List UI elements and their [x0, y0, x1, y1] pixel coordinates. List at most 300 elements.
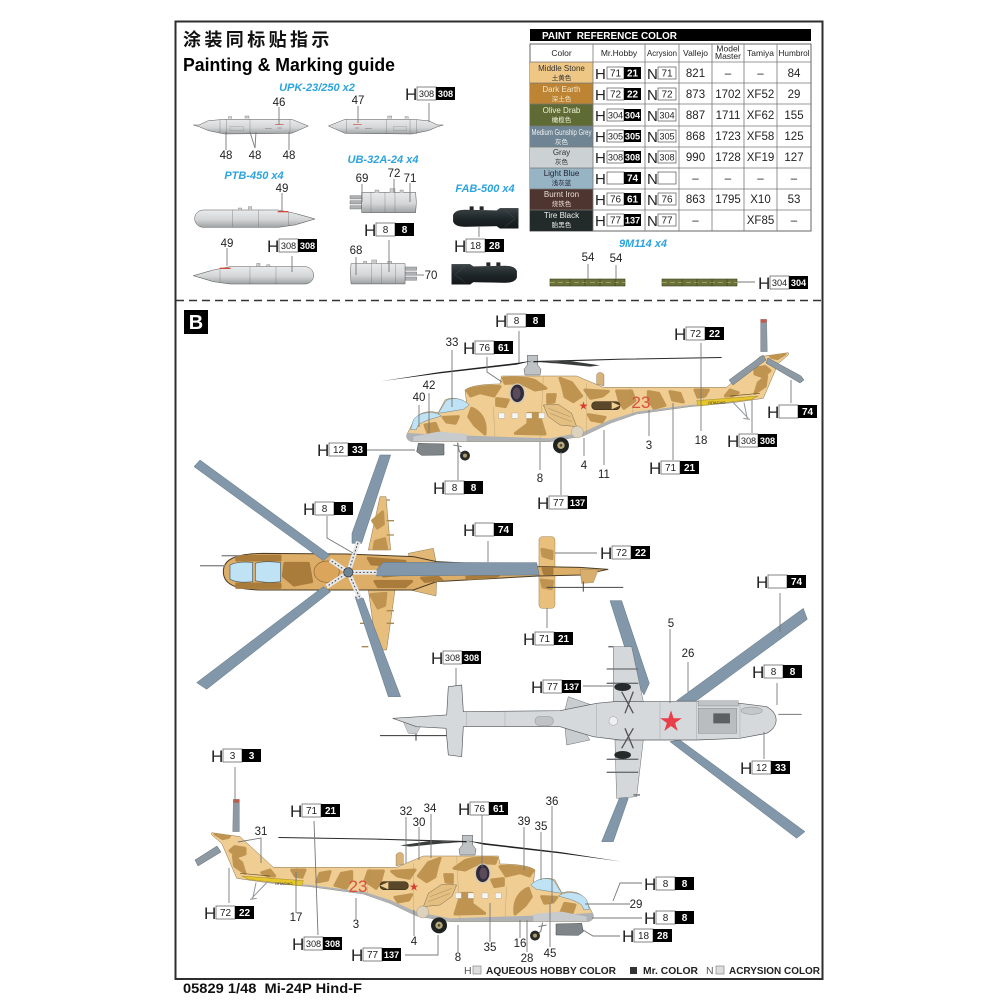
- brand equivalents: –: [725, 68, 732, 80]
- brand equivalents: 873: [686, 89, 705, 101]
- table heading: [530, 29, 811, 42]
- brand equivalents: 127: [784, 152, 804, 164]
- 9M114 missile left: [550, 279, 625, 286]
- PTB-450 tank lower: [193, 263, 314, 284]
- Mr.Hobby and Acrysion codes: 137: [625, 216, 640, 226]
- stabilizer and fuselage: [393, 685, 776, 757]
- H label 8 nose gear: [433, 479, 483, 498]
- H label 3 3: [211, 747, 261, 766]
- FAB-500 bomb upper: [453, 207, 518, 228]
- tail stabilizer: [539, 537, 555, 608]
- H label 12 33 nose: H: [740, 759, 752, 778]
- tail text: ОПАСНО: [275, 881, 292, 886]
- red number 23: 23: [632, 393, 650, 412]
- helicopter: port side view: [378, 319, 804, 461]
- H label 77 137: H: [537, 494, 549, 513]
- H label 308 tank: 308: [300, 241, 315, 251]
- starboard part numbers: 30: [413, 817, 425, 829]
- H label 18 28 gun: H: [622, 927, 634, 946]
- brand equivalents: 1795: [715, 194, 741, 206]
- H label 76 61 starboard: 61: [493, 804, 504, 815]
- color names: Medium Gunship Grey: [532, 128, 592, 137]
- Mr.Hobby and Acrysion codes: N: [647, 129, 658, 146]
- H label 74 top blade: H: [463, 521, 475, 540]
- ordnance part numbers: 72: [388, 168, 400, 180]
- Mr.Hobby and Acrysion codes: 22: [627, 90, 638, 100]
- ordnance headings: FAB-500 x4: [455, 183, 515, 195]
- helicopter: top view: [194, 455, 623, 697]
- H label 76 61 starboard: 76: [474, 804, 485, 815]
- brand equivalents: 821: [686, 68, 705, 80]
- ordnance part numbers: 47: [352, 95, 364, 107]
- H label 308 starboard: 308: [306, 939, 321, 949]
- H label 76 61: [463, 339, 513, 358]
- H label 8 nose: 8: [771, 667, 777, 678]
- ordnance headings: UB-32A-24 x4: [348, 154, 418, 166]
- color names: Dark Earth: [542, 85, 581, 94]
- H label 304: [758, 274, 808, 293]
- H label 8 canopy: 8: [682, 879, 688, 890]
- H label 71 21 starboard: [290, 802, 340, 821]
- H label 71 21 starboard: H: [290, 802, 302, 821]
- side view part numbers: 33: [446, 337, 458, 349]
- brand equivalents: 863: [686, 194, 705, 206]
- product footer: 05829 1/48 Mi-24P Hind-F: [183, 981, 362, 996]
- struts: [622, 692, 633, 748]
- section B badge: B: [189, 312, 203, 334]
- brand equivalents: X10: [750, 194, 771, 206]
- Mr.Hobby and Acrysion codes: 72: [610, 90, 621, 100]
- starboard part numbers: 35: [535, 821, 547, 833]
- ordnance part numbers: 48: [249, 150, 261, 162]
- starboard part numbers: 16: [514, 938, 526, 950]
- H label 308: [405, 85, 455, 104]
- color names: Middle Stone: [538, 64, 585, 73]
- brand equivalents: 990: [686, 152, 705, 164]
- tail fin: [402, 718, 422, 734]
- H label 18 28 gun: [622, 927, 672, 946]
- brand equivalents: –: [725, 173, 732, 185]
- UB-32 rocket pod lower: [350, 260, 417, 284]
- brand equivalents: –: [791, 215, 798, 227]
- H label 72 22 starboard: 72: [220, 908, 231, 919]
- starboard part numbers: 3: [353, 919, 359, 931]
- Mr.Hobby and Acrysion codes: 71: [610, 68, 621, 80]
- starboard part numbers: 17: [290, 912, 302, 924]
- tail blade: [380, 732, 447, 741]
- H label 77 137: 77: [553, 498, 564, 509]
- H label 12 33: H: [317, 441, 329, 460]
- brand equivalents: –: [757, 68, 764, 80]
- H label 8 nose gear: 8: [471, 483, 477, 494]
- H label 72 22: 22: [709, 329, 720, 340]
- helicopter: starboard side view: [195, 799, 622, 941]
- H label 12 33: 33: [352, 445, 363, 456]
- FAB-500 bomb lower: [452, 263, 517, 284]
- underside part numbers: 5: [668, 618, 674, 630]
- red number 23: 23: [349, 877, 367, 896]
- H label 308 tank: [267, 237, 317, 256]
- H label 308 skid: 308: [741, 436, 756, 446]
- H label 71 21 stabilizer: H: [523, 630, 535, 649]
- H label 72 22 stabilizer: 22: [635, 548, 646, 559]
- ordnance part numbers: 48: [220, 150, 232, 162]
- H label 308 belly: H: [431, 649, 443, 668]
- H label 18 28: H: [454, 237, 466, 256]
- H label 77 137 starboard: [351, 946, 401, 965]
- H label 77 137 starboard: 77: [367, 950, 378, 961]
- starboard part numbers: 8: [455, 952, 461, 964]
- Mr.Hobby and Acrysion codes: 308: [625, 152, 640, 162]
- side view part numbers: 42: [423, 380, 435, 392]
- H label 77 137 starboard: H: [351, 946, 363, 965]
- brand equivalents: –: [692, 173, 699, 185]
- H label 74: H: [767, 403, 779, 422]
- H label 12 33 nose: 33: [775, 763, 786, 774]
- red star underside: ★: [660, 708, 682, 734]
- H label 8 nose: H: [752, 663, 764, 682]
- ordnance drawings: [193, 116, 737, 286]
- color names: 灰色: [555, 137, 568, 146]
- H label 304: 304: [791, 278, 807, 288]
- H label 72 22: [674, 325, 724, 344]
- Mr.Hobby and Acrysion codes: H: [595, 171, 606, 188]
- UB-32 rocket pod upper: [350, 189, 416, 213]
- brand equivalents: 1723: [715, 131, 741, 143]
- starboard part numbers: 32: [400, 806, 412, 818]
- H label 72 22 stabilizer: 72: [616, 548, 627, 559]
- H label 8 nose lower: H: [644, 909, 656, 928]
- Mr.Hobby and Acrysion codes: N: [647, 66, 658, 83]
- rotor blades: [194, 460, 330, 561]
- H label 308 starboard: H: [292, 935, 304, 954]
- Mr.Hobby and Acrysion codes: 76: [661, 194, 673, 206]
- H label 308 starboard: 308: [325, 939, 340, 949]
- H label 308 belly: 308: [464, 653, 479, 663]
- 9M114 missile right: [662, 279, 737, 286]
- H label 76 61: 76: [479, 343, 490, 354]
- Mr.Hobby and Acrysion codes: 305: [659, 132, 675, 142]
- H label 8 hub: [495, 312, 545, 331]
- starboard part numbers: 39: [518, 816, 530, 828]
- H label 74 blade: 74: [791, 577, 802, 588]
- canopies: [230, 562, 253, 582]
- side view part numbers: 3: [646, 440, 652, 452]
- ordnance part numbers: 48: [283, 150, 295, 162]
- english title: Painting & Marking guide: [183, 55, 395, 75]
- engine intakes: [565, 697, 592, 745]
- H label 72 22 starboard: [204, 904, 254, 923]
- H label 12 33: [317, 441, 367, 460]
- ordnance part numbers: [220, 95, 623, 282]
- Mr.Hobby and Acrysion codes: 72: [661, 90, 673, 100]
- H label 77 137: [537, 494, 587, 513]
- table column headings: Model: [716, 44, 740, 54]
- Mr.Hobby and Acrysion codes: 304: [659, 110, 675, 120]
- rotor hub: [327, 542, 377, 598]
- table column headings: Master: [715, 51, 741, 61]
- brand equivalents: 887: [686, 110, 705, 122]
- Mr.Hobby and Acrysion codes: 71: [661, 68, 673, 80]
- color names: Gray: [553, 148, 570, 157]
- H label 8 top rotor: 8: [341, 504, 347, 515]
- ordnance part numbers: 54: [582, 252, 595, 264]
- Mr.Hobby and Acrysion codes: [595, 66, 676, 230]
- color names: 浅灰蓝: [552, 178, 572, 187]
- table column headings: Color: [551, 48, 572, 58]
- H label 74 top blade: 74: [498, 525, 509, 536]
- H label 8 nose lower: [644, 909, 694, 928]
- starboard part numbers: 45: [544, 948, 556, 960]
- H label 8 top rotor: [303, 500, 353, 519]
- brand equivalents: XF62: [747, 110, 774, 122]
- H label 308 belly: 308: [445, 653, 460, 663]
- H label 12 33: 12: [333, 445, 344, 456]
- PTB-450 tank upper: [195, 207, 315, 227]
- engine bay: [698, 708, 737, 733]
- H label 3 3: 3: [249, 751, 255, 762]
- tail text: ОПАСНО: [708, 400, 725, 405]
- Mr.Hobby and Acrysion codes: 304: [625, 110, 641, 120]
- color names: 橄榄色: [552, 115, 572, 124]
- brand equivalents: 868: [686, 131, 705, 143]
- H label 71 21: 21: [684, 463, 695, 474]
- starboard part numbers: 28: [521, 953, 533, 965]
- ordnance part numbers: 70: [425, 270, 437, 282]
- page frame: [176, 22, 822, 979]
- underside part numbers: [668, 618, 694, 660]
- helicopter: underside view: [380, 601, 807, 842]
- H label 74 blade: [756, 573, 806, 592]
- H label 8 pod: 8: [402, 225, 408, 236]
- H label 71 21 stabilizer: [523, 630, 573, 649]
- H label 76 61 starboard: [458, 800, 508, 819]
- Mr.Hobby and Acrysion codes: 308: [608, 152, 623, 162]
- H label 18 28: [454, 237, 504, 256]
- H label 308 tank: 308: [281, 241, 296, 251]
- nose probe: [778, 713, 802, 716]
- H label 71 21 stabilizer: 71: [539, 634, 550, 645]
- UPK-23 pod right: [328, 116, 443, 134]
- paint legend: [464, 965, 820, 977]
- H label 8 pod: [364, 221, 414, 240]
- starboard part numbers: [255, 796, 642, 965]
- side view part numbers: 40: [413, 392, 425, 404]
- paint reference table: [530, 29, 811, 231]
- H label 77 137 belly: 137: [564, 682, 579, 692]
- brand equivalents: XF85: [747, 215, 774, 227]
- Mr.Hobby and Acrysion codes: 305: [608, 132, 623, 142]
- side view part numbers: 18: [695, 435, 707, 447]
- brand equivalents: 1702: [715, 89, 741, 101]
- H label 71 21: H: [649, 459, 661, 478]
- table column headings: Acrysion: [647, 48, 677, 58]
- ordnance headings: 9M114 x4: [619, 238, 667, 250]
- H label 8 nose gear: 8: [452, 483, 458, 494]
- brand equivalents: –: [692, 215, 699, 227]
- paint legend: Mr. COLOR: [643, 965, 698, 977]
- wings: [368, 497, 395, 650]
- brand equivalents: 84: [788, 68, 801, 80]
- brand equivalents: 1711: [716, 110, 740, 122]
- H label 308 tank: H: [267, 237, 279, 256]
- H label 71 21: [649, 459, 699, 478]
- H label 71 21 starboard: 71: [306, 806, 317, 817]
- H label 72 22 stabilizer: [600, 544, 650, 563]
- brand equivalents: –: [757, 173, 764, 185]
- H label 77 137 belly: [531, 678, 581, 697]
- underside leader lines: [670, 593, 780, 759]
- H label 18 28 gun: 18: [638, 931, 649, 942]
- ordnance part numbers: 49: [276, 183, 288, 195]
- paint legend: ACRYSION COLOR: [729, 965, 820, 977]
- tail rotor: [547, 582, 623, 592]
- starboard part numbers: 36: [546, 796, 558, 808]
- brand equivalents: 1728: [715, 152, 741, 164]
- Mr.Hobby and Acrysion codes: H: [595, 87, 606, 104]
- side view part numbers: 4: [581, 460, 588, 472]
- H label 76 61: H: [463, 339, 475, 358]
- H label 308 skid: 308: [760, 436, 775, 446]
- color names: 烧铁色: [552, 199, 572, 208]
- H label 8 hub: 8: [514, 316, 520, 327]
- H label 308 starboard: [292, 935, 342, 954]
- H label 8 pod: 8: [383, 225, 389, 236]
- H label 74 blade: H: [756, 573, 768, 592]
- table column headings: Humbrol: [778, 48, 810, 58]
- H label 308: 308: [438, 89, 453, 99]
- H label 72 22: 72: [690, 329, 701, 340]
- H label 8 top rotor: H: [303, 500, 315, 519]
- section B badge: [184, 310, 208, 334]
- Mr.Hobby and Acrysion codes: N: [647, 150, 658, 167]
- H label 8 hub: H: [495, 312, 507, 331]
- Mr.Hobby and Acrysion codes: N: [647, 192, 658, 209]
- underside part numbers: 26: [682, 648, 694, 660]
- starboard part numbers: 35: [484, 942, 496, 954]
- H label 72 22: H: [674, 325, 686, 344]
- brand equivalents: 125: [784, 131, 804, 143]
- H label 8 nose: 8: [790, 667, 796, 678]
- Mr.Hobby and Acrysion codes: N: [647, 171, 658, 188]
- H label 8 top rotor: 8: [322, 504, 328, 515]
- H label 74 top blade: [463, 521, 513, 540]
- table column headings: Mr.Hobby: [601, 48, 638, 58]
- table heading: PAINT REFERENCE COLOR: [542, 31, 678, 42]
- ordnance part numbers: 71: [404, 173, 416, 185]
- H label 74: 74: [802, 407, 813, 418]
- H label 71 21 starboard: 21: [325, 806, 336, 817]
- H label 76 61: 61: [498, 343, 509, 354]
- H label 308: H: [405, 85, 417, 104]
- H label 8 hub: 8: [533, 316, 539, 327]
- H label 3 3: H: [211, 747, 223, 766]
- H label 76 61 starboard: H: [458, 800, 470, 819]
- brand equivalents: XF58: [747, 131, 774, 143]
- H label 304: H: [758, 274, 770, 293]
- H label 72 22 starboard: H: [204, 904, 216, 923]
- H label 8 nose gear: H: [433, 479, 445, 498]
- paint legend: H: [464, 965, 472, 977]
- side view leader lines: [367, 331, 791, 495]
- brand equivalents: XF19: [747, 152, 774, 164]
- table column headings: Tamiya: [747, 48, 774, 58]
- Mr.Hobby and Acrysion codes: 76: [610, 194, 621, 206]
- H label 72 22 starboard: 22: [239, 908, 250, 919]
- color names: 胎黑色: [552, 220, 572, 229]
- brand equivalents: 29: [788, 89, 800, 101]
- H label 8 pod: H: [364, 221, 376, 240]
- brand equivalents: [686, 68, 804, 227]
- fuselage: [223, 553, 608, 590]
- Mr.Hobby and Acrysion codes: 77: [661, 216, 673, 226]
- color names: Tire Black: [544, 211, 580, 220]
- ordnance headings: [224, 82, 667, 250]
- H label 71 21: 71: [665, 463, 676, 474]
- table column headings: [551, 44, 810, 61]
- H label 304: 304: [772, 278, 787, 288]
- starboard part numbers: 34: [424, 803, 437, 815]
- H label 308 skid: [727, 432, 777, 451]
- tail rotor blade: [195, 846, 221, 866]
- H label 8 nose lower: 8: [663, 913, 669, 924]
- wheels: [614, 683, 631, 691]
- Mr.Hobby and Acrysion codes: H: [595, 150, 606, 167]
- H label 8 nose: [752, 663, 802, 682]
- H label 308: 308: [419, 89, 434, 99]
- color names: 土黄色: [552, 73, 572, 82]
- Mr.Hobby and Acrysion codes: 308: [659, 152, 675, 162]
- Mr.Hobby and Acrysion codes: N: [647, 87, 658, 104]
- tail rotor blades: [729, 355, 804, 385]
- side view part numbers: 11: [598, 469, 610, 481]
- color names: Light Blue: [544, 169, 580, 178]
- H label 77 137 belly: 77: [547, 682, 558, 693]
- top view leader lines: [327, 516, 613, 687]
- H label 18 28: 18: [470, 241, 481, 252]
- starboard part numbers: 29: [630, 899, 642, 911]
- H label 8 canopy: H: [644, 875, 656, 894]
- color names: 灰色: [555, 157, 568, 166]
- Mr.Hobby and Acrysion codes: 61: [627, 194, 638, 206]
- red star: ★: [579, 401, 588, 411]
- Mr.Hobby and Acrysion codes: H: [595, 213, 606, 230]
- ordnance headings: PTB-450 x4: [224, 170, 284, 182]
- color names: Olive Drab: [543, 106, 581, 115]
- side view part numbers: 8: [537, 473, 543, 485]
- paint legend: N: [706, 965, 714, 977]
- blades: [610, 601, 649, 695]
- H label 12 33 nose: [740, 759, 790, 778]
- color names: Burnt Iron: [544, 190, 579, 199]
- Mr.Hobby and Acrysion codes: H: [595, 66, 606, 83]
- Mr.Hobby and Acrysion codes: N: [647, 213, 658, 230]
- brand equivalents: XF52: [747, 89, 774, 101]
- brand equivalents: 155: [784, 110, 804, 122]
- H label 77 137 starboard: 137: [384, 950, 399, 960]
- H label 72 22 stabilizer: H: [600, 544, 612, 563]
- starboard leader lines: [229, 767, 642, 955]
- Mr.Hobby and Acrysion codes: H: [595, 192, 606, 209]
- color names: [532, 64, 592, 229]
- ordnance part numbers: 54: [610, 253, 623, 265]
- H label 3 3: 3: [230, 751, 236, 762]
- ordnance part numbers: 46: [273, 97, 285, 109]
- H label 18 28 gun: 28: [657, 931, 668, 942]
- Mr.Hobby and Acrysion codes: H: [595, 108, 606, 125]
- table column headings: Vallejo: [683, 48, 708, 58]
- engine intakes: [408, 548, 437, 596]
